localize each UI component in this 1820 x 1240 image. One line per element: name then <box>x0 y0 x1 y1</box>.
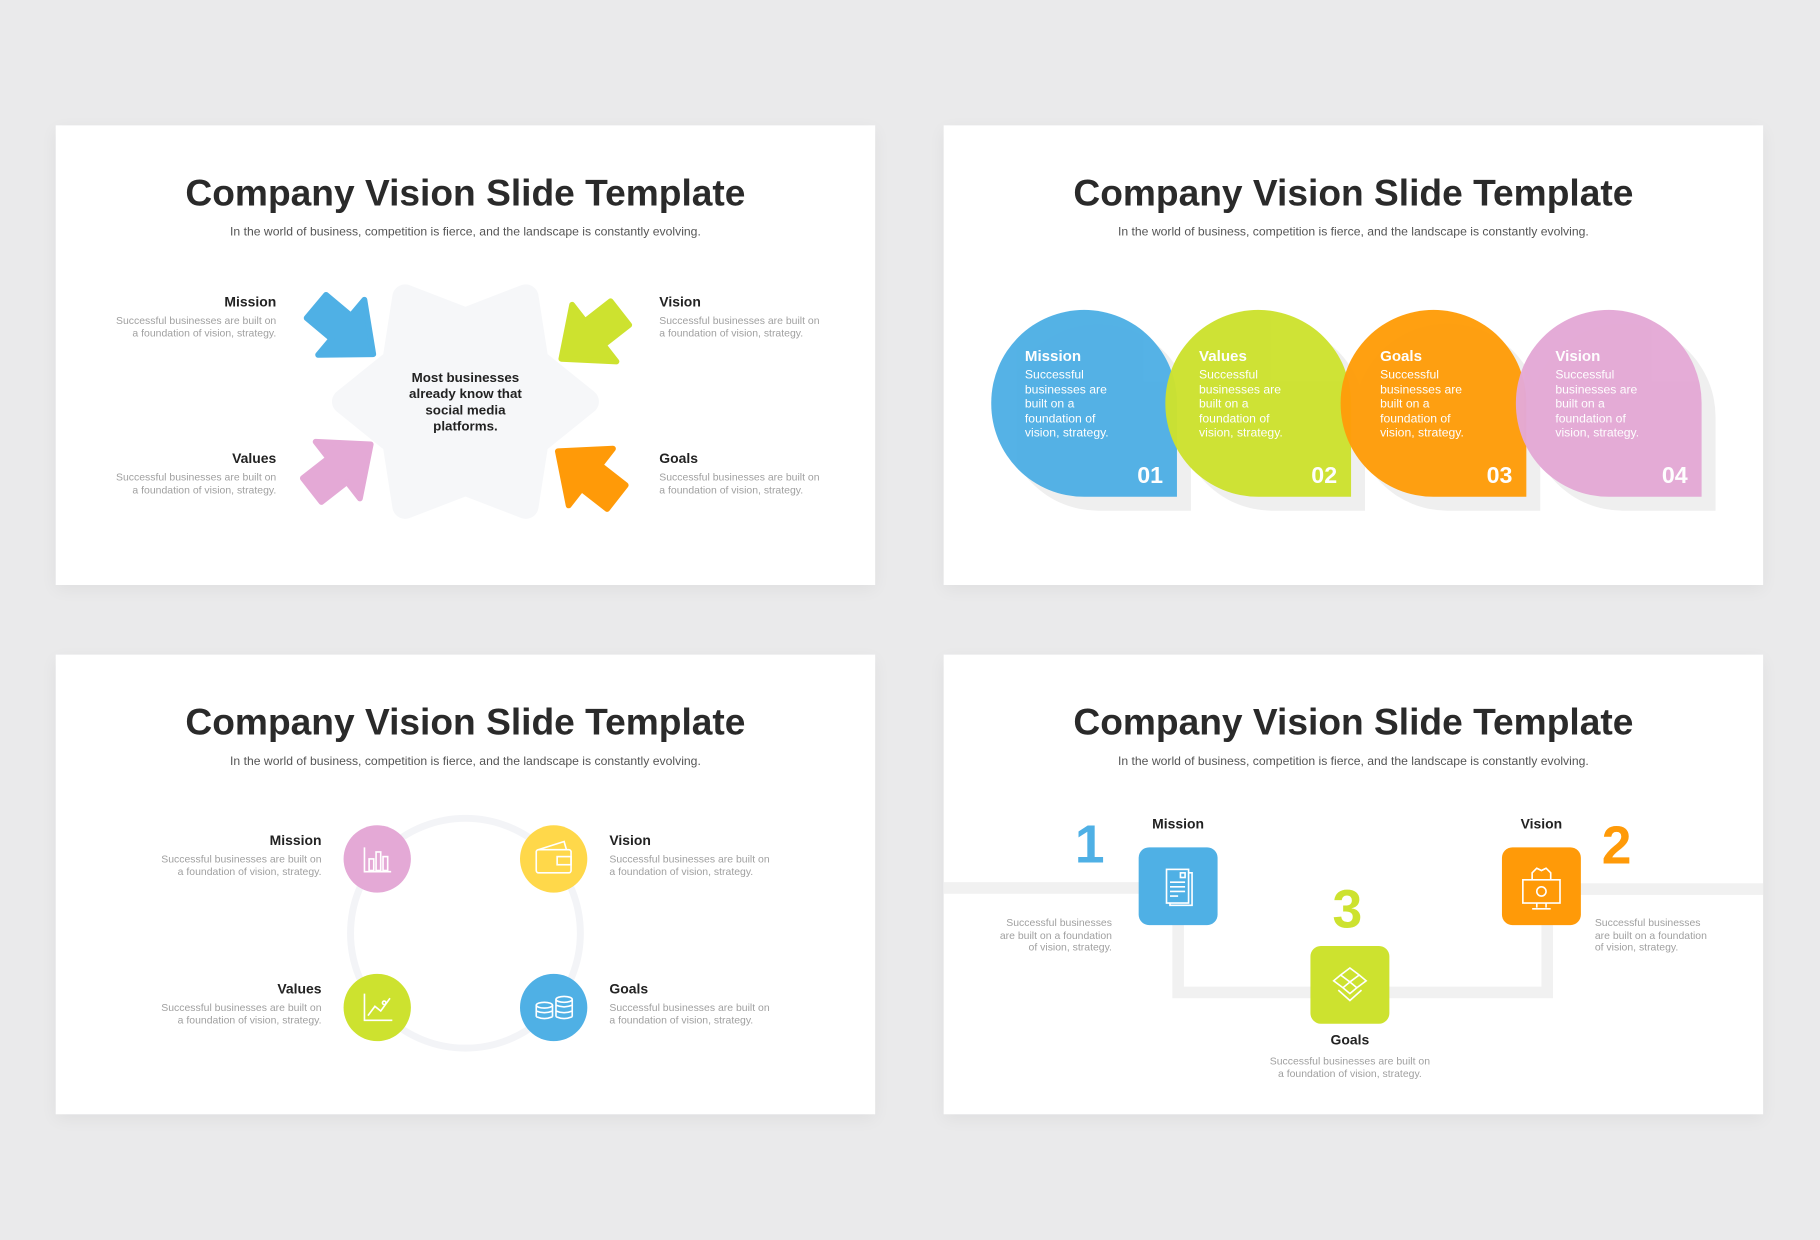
circle 02 values <box>1165 310 1351 497</box>
connector lines <box>944 882 1763 998</box>
item: goals: Goals <box>659 450 698 467</box>
circle 04 vision: Successful businesses are built on a foundation of vision, strategy. <box>1555 368 1639 440</box>
item: mission: Mission <box>224 294 276 310</box>
desc right <box>1595 917 1707 953</box>
desc goals: a foundation of vision, strategy. <box>1278 1067 1422 1079</box>
panel: ring <box>56 655 875 1114</box>
circle 03 goals: 03 <box>1487 463 1512 489</box>
item: vision: Vision <box>609 832 651 848</box>
title: Company Vision Slide Template <box>1073 172 1633 214</box>
item: values: Successful businesses are built on <box>116 471 276 483</box>
subtitle: In the world of business, competition is fierce, and the landscape is constantly evolving. <box>230 225 701 239</box>
box: mission document icon <box>1139 847 1218 925</box>
item: goals: a foundation of vision, strategy. <box>659 483 803 495</box>
item: values <box>116 450 276 496</box>
label goals: Goals <box>1331 1032 1369 1048</box>
item: values <box>161 981 322 1026</box>
circle 01 mission <box>991 310 1177 497</box>
item: mission: Successful businesses are built on <box>161 853 322 865</box>
title: Company Vision Slide Template <box>185 172 745 214</box>
circle 01 mission: Successful businesses are built on a foundation of vision, strategy. <box>1025 368 1109 440</box>
label mission: Mission <box>1152 816 1204 832</box>
item: goals: Successful businesses are built on <box>609 1002 770 1013</box>
circle 04 vision: 04 <box>1662 463 1688 489</box>
item: vision: a foundation of vision, strategy. <box>659 327 803 338</box>
item: values: Values <box>232 450 276 467</box>
item: mission <box>116 294 276 338</box>
desc left <box>1000 917 1112 953</box>
panel: arrows star <box>56 125 875 585</box>
arrow: pink <box>290 416 393 518</box>
circle 02 values: Values <box>1199 347 1247 364</box>
item: goals: Successful businesses are built on <box>659 471 820 483</box>
label vision: Vision <box>1521 816 1562 832</box>
item: vision: a foundation of vision, strategy. <box>609 865 753 877</box>
item: goals <box>609 981 770 1026</box>
icon: coins blue <box>520 974 587 1041</box>
subtitle: In the world of business, competition is fierce, and the landscape is constantly evolving. <box>1118 754 1589 768</box>
title: Company Vision Slide Template <box>1073 701 1633 743</box>
subtitle: In the world of business, competition is fierce, and the landscape is constantly evolving. <box>1118 225 1589 239</box>
number 3: 3 <box>1332 879 1362 939</box>
item: goals: a foundation of vision, strategy. <box>609 1014 753 1025</box>
number 2: 2 <box>1602 815 1631 875</box>
item: vision: Vision <box>659 294 701 310</box>
item: values: a foundation of vision, strategy. <box>132 483 276 495</box>
item: vision: Successful businesses are built on <box>659 315 820 326</box>
item: mission: a foundation of vision, strategy. <box>178 865 322 877</box>
desc right: of vision, strategy. <box>1595 941 1678 953</box>
desc left: are built on a foundation <box>1000 929 1112 941</box>
subtitle: In the world of business, competition is fierce, and the landscape is constantly evolving. <box>230 754 701 768</box>
title: Company Vision Slide Template <box>185 701 745 743</box>
item: vision <box>609 832 770 877</box>
number 1: 1 <box>1075 814 1105 874</box>
item: values: a foundation of vision, strategy. <box>178 1014 322 1025</box>
panel: steps <box>944 655 1763 1114</box>
desc left: of vision, strategy. <box>1029 941 1112 953</box>
item: goals: Goals <box>609 981 648 997</box>
icon: wallet yellow <box>520 825 587 893</box>
item: mission <box>161 832 322 877</box>
icon: bar chart pink <box>344 825 411 893</box>
center text: Most businesses already know that social media platforms. <box>409 371 522 434</box>
shadows <box>1026 345 1716 510</box>
circle 03 goals <box>1341 310 1526 497</box>
item: mission: Mission <box>270 832 322 848</box>
item: mission: Successful businesses are built on <box>116 315 276 326</box>
item: vision <box>659 294 820 338</box>
item: values: Values <box>277 981 322 997</box>
circle 04 vision: Vision <box>1555 347 1600 364</box>
circle 01 mission: 01 <box>1137 463 1163 489</box>
box: vision monitor icon <box>1502 847 1581 925</box>
desc goals: Successful businesses are built on <box>1270 1055 1430 1067</box>
desc right: are built on a foundation <box>1595 929 1707 941</box>
arrow: blue <box>293 279 396 382</box>
circle 01 mission: Mission <box>1025 347 1081 364</box>
ring diagram <box>344 815 588 1052</box>
circle 03 goals: Successful businesses are built on a foundation of vision, strategy. <box>1380 368 1464 440</box>
star diagram <box>300 284 632 518</box>
circle 02 values: 02 <box>1311 463 1337 489</box>
panel: circles <box>944 125 1763 585</box>
star shape <box>345 297 586 506</box>
item: mission: a foundation of vision, strategy. <box>132 327 276 338</box>
desc right: Successful businesses <box>1595 917 1700 929</box>
desc left: Successful businesses <box>1006 917 1112 929</box>
item: goals <box>659 450 820 496</box>
circle 03 goals: Goals <box>1380 347 1422 364</box>
arrow: green <box>539 285 642 387</box>
desc goals <box>1270 1055 1430 1079</box>
icon: growth chart green <box>344 974 411 1041</box>
box: goals dropbox icon <box>1310 946 1389 1024</box>
item: values: Successful businesses are built on <box>161 1002 322 1013</box>
circle 02 values: Successful businesses are built on a foundation of vision, strategy. <box>1199 368 1283 440</box>
arrow: orange <box>536 423 639 525</box>
circle 04 vision <box>1516 310 1702 497</box>
item: vision: Successful businesses are built on <box>609 853 770 865</box>
